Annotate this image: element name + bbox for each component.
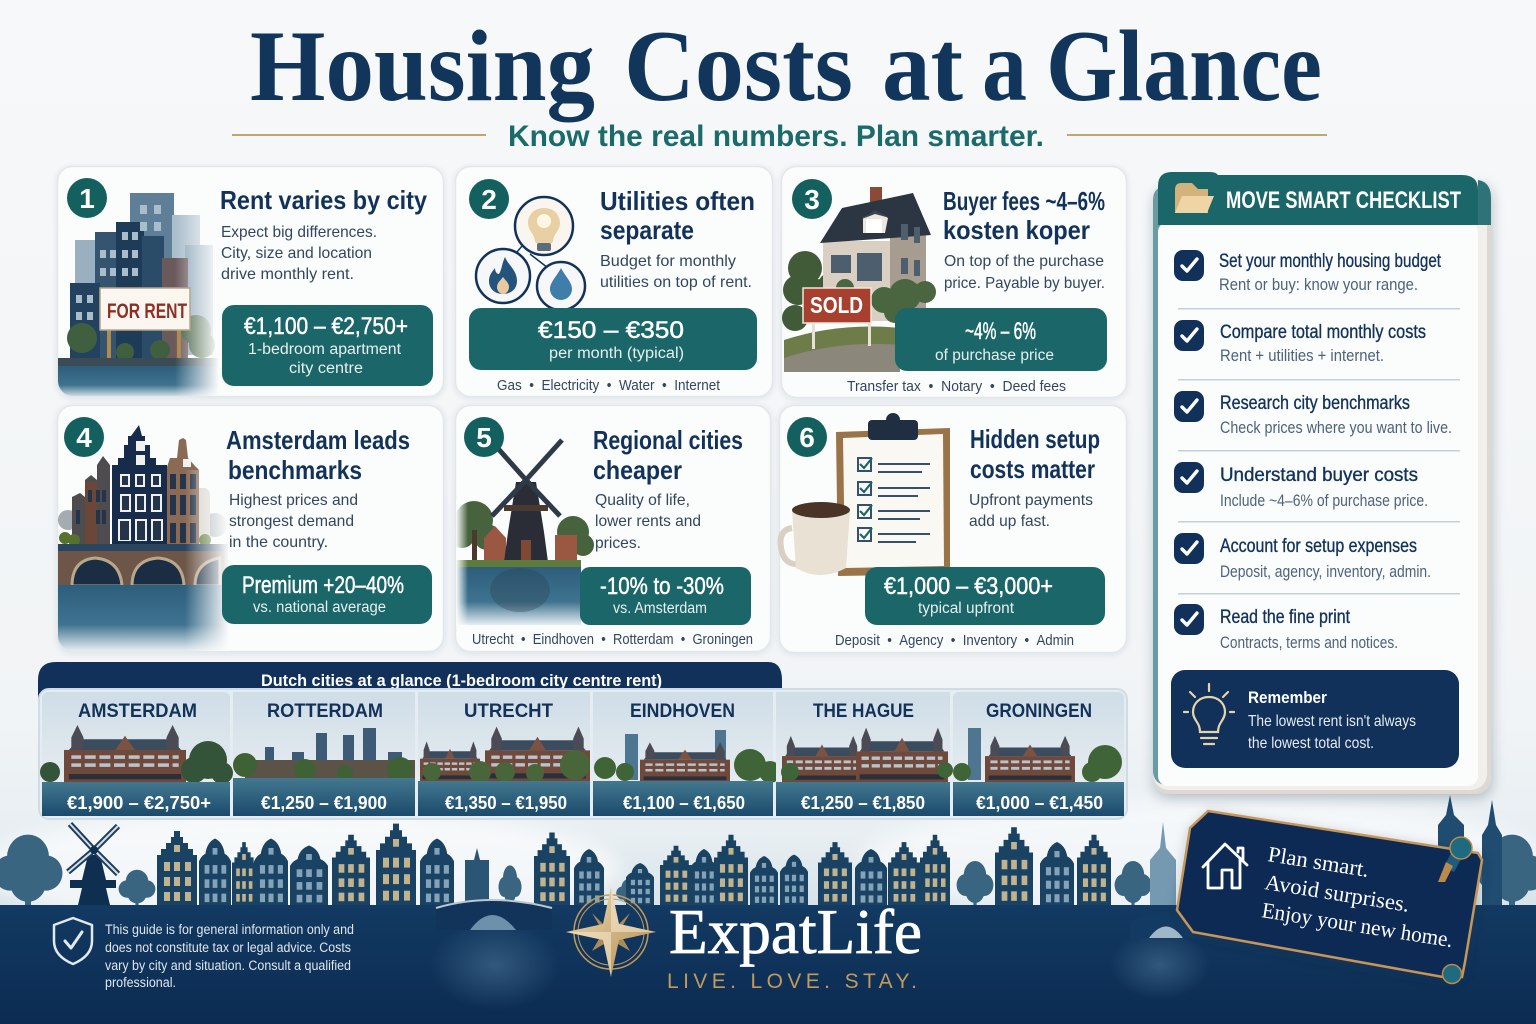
callout: remember: Remember [1248, 688, 1327, 707]
checklist item 2: Compare total monthly costs [1220, 322, 1426, 343]
price callout: €150 – €350 [538, 317, 684, 344]
checklist item 6: Contracts, terms and notices. [1220, 634, 1398, 652]
skyline and water footer [0, 795, 1536, 1024]
checklist item 5: Deposit, agency, inventory, admin. [1220, 563, 1431, 581]
body text: City, size and location [221, 245, 372, 262]
cost items: Deposit • Agency • Inventory • Admin [835, 632, 1074, 649]
city: The Hague: €1,250 – €1,850 [801, 793, 925, 813]
disclaimer text: This guide is for general information only and [105, 922, 354, 937]
title: Costs [624, 10, 853, 123]
city: Amsterdam: AMSTERDAM [78, 701, 197, 722]
body text: add up fast. [969, 513, 1050, 530]
cost items: Gas • Electricity • Water • Internet [497, 377, 721, 394]
title [250, 10, 1322, 123]
city: Groningen: €1,000 – €1,450 [976, 793, 1103, 813]
title: Housing [250, 10, 595, 123]
number badge 1: 1 [79, 183, 95, 214]
heading: Rent varies by city [220, 185, 427, 215]
number badge 1 [67, 178, 107, 218]
price callout: per month (typical) [549, 345, 684, 362]
icon: far right bridge [1130, 912, 1195, 938]
city: Groningen [953, 692, 1124, 816]
body text: On top of the purchase [944, 253, 1104, 270]
heading: Regional cities [593, 425, 743, 455]
city: Amsterdam [40, 692, 233, 816]
city: Rotterdam: €1,250 – €1,900 [261, 793, 387, 813]
checklist item 4: Understand buyer costs [1220, 465, 1418, 486]
heading [593, 425, 743, 485]
price callout [865, 567, 1105, 625]
body text [600, 253, 752, 291]
heading [226, 425, 410, 485]
city: The Hague [776, 692, 953, 816]
checklist item 1: Rent or buy: know your range. [1219, 276, 1418, 294]
note text: Enjoy your new home. [1260, 897, 1455, 952]
icon: utilities bulb flame drop [476, 197, 585, 310]
number badge 4 [64, 417, 104, 457]
heading: Hidden setup [970, 424, 1100, 454]
city: Utrecht: UTRECHT [464, 701, 553, 722]
icon: clipboard checklist [836, 413, 950, 576]
logo: compass [566, 887, 656, 977]
disclaimer text: professional. [105, 975, 176, 990]
body text: Budget for monthly [600, 253, 736, 270]
panel: city strip header: Dutch cities at a glance (1-bedroom city centre rent) [261, 671, 662, 690]
body text [944, 253, 1105, 292]
number badge 4: 4 [76, 422, 92, 453]
price callout: 1-bedroom apartment [248, 341, 402, 358]
note text [1260, 841, 1455, 952]
disclaimer text: vary by city and situation. Consult a qualified [105, 958, 351, 973]
panel: card 2 utilities [456, 166, 772, 396]
number badge 3: 3 [804, 184, 820, 215]
icon: sold sign: SOLD [810, 292, 863, 318]
panel: city strip header [38, 662, 782, 700]
checklist item 3: Research city benchmarks [1220, 393, 1410, 414]
subtitle: Know the real numbers. Plan smarter. [508, 120, 1044, 153]
illustration: house with sold sign [782, 187, 936, 372]
checklist item 5: Account for setup expenses [1220, 536, 1417, 557]
price callout: Premium +20–40% [242, 572, 404, 599]
city: Eindhoven: €1,100 – €1,650 [623, 793, 745, 813]
body text: Highest prices and [229, 492, 358, 509]
logo: wordmark: LIVE. LOVE. STAY. [667, 970, 917, 993]
checklist item 4 [1174, 462, 1428, 510]
heading: Buyer fees ~4–6% [943, 186, 1105, 216]
icon: top pin [1438, 837, 1472, 882]
callout: remember [1171, 670, 1459, 768]
heading: costs matter [970, 454, 1095, 484]
price callout: €1,100 – €2,750+ [244, 313, 408, 340]
number badge 2 [469, 179, 509, 219]
icon: shield [54, 918, 92, 964]
number badge 6 [787, 417, 827, 457]
price callout: of purchase price [935, 347, 1054, 364]
number badge 5: 5 [476, 422, 492, 453]
title: at [882, 10, 963, 123]
illustration: Amsterdam canal houses [58, 425, 229, 652]
icon: folder [1175, 183, 1214, 213]
heading [970, 424, 1100, 484]
checklist item 6 [1174, 604, 1398, 652]
illustration: city skyline with for rent sign [58, 193, 219, 396]
note text: Avoid surprises. [1263, 869, 1411, 917]
price callout: vs. Amsterdam [613, 600, 707, 617]
heading [600, 186, 755, 245]
heading: cheaper [593, 455, 682, 485]
body text: Upfront payments [969, 492, 1093, 509]
price callout [895, 308, 1107, 371]
checklist item 2 [1174, 320, 1426, 365]
body text: Expect big differences. [221, 224, 377, 241]
body text: Quality of life, [595, 492, 690, 509]
callout: remember: the lowest total cost. [1248, 735, 1374, 752]
panel: card 6 hidden costs [780, 406, 1126, 652]
checklist item 3 [1174, 391, 1452, 437]
panel: card 1 rent [58, 166, 444, 398]
body text: utilities on top of rent. [600, 274, 752, 291]
disclaimer text [105, 922, 354, 990]
title: Glance [1046, 10, 1322, 123]
city: The Hague: THE HAGUE [813, 701, 914, 722]
checklist item 1 [1174, 250, 1442, 294]
illustration: windmill by water [449, 440, 594, 626]
city: Utrecht [418, 692, 590, 816]
city: Groningen: GRONINGEN [986, 701, 1092, 722]
panel: checklist [1153, 172, 1491, 794]
icon: for rent sign [100, 288, 190, 358]
city names: Utrecht • Eindhoven • Rotterdam • Groningen [472, 631, 753, 648]
heading: kosten koper [943, 215, 1090, 245]
price callout [222, 565, 432, 624]
number badge 6: 6 [799, 422, 815, 453]
price callout: vs. national average [253, 599, 386, 616]
icon: canal bridge [436, 900, 552, 930]
heading: Amsterdam leads [226, 425, 410, 455]
disclaimer text: does not constitute tax or legal advice. Costs [105, 940, 351, 955]
body text: in the country. [229, 534, 328, 551]
icon: bottom pin [1442, 964, 1462, 984]
city: Amsterdam: €1,900 – €2,750+ [67, 793, 211, 813]
body text: lower rents and [595, 513, 701, 530]
city: Utrecht: €1,350 – €1,950 [445, 793, 567, 813]
checklist item 6: Read the fine print [1220, 607, 1351, 628]
heading: Utilities often [600, 186, 755, 216]
body text: prices. [595, 535, 641, 552]
icon: sold sign [803, 288, 871, 323]
icon: house outline [1203, 844, 1247, 888]
heading: benchmarks [228, 455, 362, 485]
price callout: €1,000 – €3,000+ [884, 573, 1053, 600]
checklist item 1: Set your monthly housing budget [1219, 251, 1442, 272]
city: Eindhoven: EINDHOVEN [630, 701, 735, 722]
heading: separate [600, 215, 694, 245]
stacked notebook pages [1153, 180, 1491, 794]
number badge 2: 2 [481, 184, 497, 215]
city: Eindhoven [593, 692, 781, 816]
heading [943, 186, 1105, 245]
price callout: typical upfront [918, 600, 1015, 617]
icon: for rent sign: FOR RENT [107, 300, 187, 323]
body text: price. Payable by buyer. [944, 275, 1105, 292]
body text [229, 492, 358, 551]
icon: windmill silhouette [68, 824, 118, 905]
checklist item 3: Check prices where you want to live. [1220, 419, 1452, 437]
number badge 3 [792, 179, 832, 219]
checklist header [1158, 172, 1478, 225]
note text: Plan smart. [1266, 841, 1371, 882]
logo: wordmark: ExpatLife [669, 896, 922, 967]
body text [221, 224, 377, 283]
price callout: city centre [289, 360, 363, 377]
panel: card 5 regional cities [449, 406, 770, 652]
body text: strongest demand [229, 513, 354, 530]
callout: plan smart note [1177, 811, 1482, 984]
price callout: -10% to -30% [600, 573, 724, 600]
number badge 5 [464, 417, 504, 457]
title: a [982, 10, 1027, 123]
panel: card 3 buyer fees [782, 166, 1126, 398]
body text [969, 492, 1093, 530]
icon: light bulb [1184, 684, 1234, 744]
checklist item 2: Rent + utilities + internet. [1220, 347, 1384, 365]
icon: coffee mug [780, 502, 850, 575]
callout: remember: The lowest rent isn't always [1248, 713, 1416, 730]
city: Rotterdam [233, 692, 415, 816]
panel: card 4 Amsterdam [58, 406, 444, 652]
price callout [469, 308, 757, 370]
city: Rotterdam: ROTTERDAM [267, 701, 383, 722]
body text [595, 492, 701, 552]
checklist header: MOVE SMART CHECKLIST [1226, 187, 1461, 214]
body text: drive monthly rent. [221, 266, 354, 283]
price callout: ~4% – 6% [965, 318, 1036, 345]
panel: city strip [39, 689, 1127, 819]
price callout [580, 567, 751, 625]
checklist item 4: Include ~4–6% of purchase price. [1220, 492, 1428, 510]
price callout [222, 305, 433, 386]
checklist item 5 [1174, 533, 1431, 581]
cost items: Transfer tax • Notary • Deed fees [847, 378, 1066, 395]
